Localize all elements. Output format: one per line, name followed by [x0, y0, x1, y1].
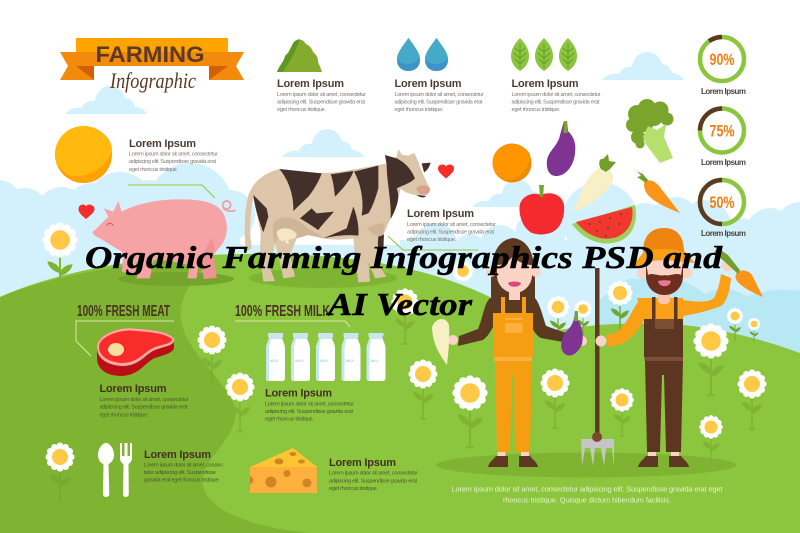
text block: bottom caption: Lorem ipsum dolor sit amet, consectetur adipiscing elit. Suspendisse gravida erat eget — [452, 484, 722, 494]
overlay title: AI Vector — [326, 286, 473, 322]
text block: cow: Lorem ipsum dolor sit amet, consectetur — [407, 222, 496, 228]
text block: leaves: Lorem ipsum dolor sit amet, consectetur — [512, 92, 601, 98]
ring chart 50%: Lorem Ipsum — [701, 229, 746, 238]
icon: hill — [277, 39, 322, 72]
cloud top left — [65, 86, 147, 114]
icon: water drops — [397, 38, 448, 71]
field daisies — [391, 260, 767, 464]
ring chart 90% — [691, 28, 753, 96]
text block: sun: eget rhoncus tristique. — [129, 167, 178, 173]
panel: fresh meat heading — [76, 303, 174, 356]
panel: fresh milk heading: 100% FRESH MILK — [235, 303, 330, 320]
ring chart 50%: 50% — [710, 193, 734, 212]
deeper sky behind man — [600, 276, 800, 360]
text block: water: Lorem Ipsum — [394, 78, 462, 90]
banner title: FARMING — [96, 42, 204, 67]
icon: broccoli — [626, 99, 674, 163]
icon: carrot — [637, 171, 680, 213]
panel: fresh milk heading — [235, 303, 350, 327]
cow and shadow — [245, 149, 431, 288]
text block: sun — [129, 138, 218, 173]
icon: milk bottles: MILK — [370, 359, 380, 363]
ground shadow under people — [436, 452, 736, 478]
icon: leaves — [511, 38, 577, 71]
text block: hill: adipiscing elit. Suspendisse gravida erat — [277, 100, 365, 106]
text block: cheese: eget rhoncus tristique. — [329, 486, 378, 492]
text block: milk: Lorem Ipsum — [265, 388, 332, 400]
text block: cheese — [329, 457, 418, 492]
ring chart 50% — [700, 180, 746, 238]
icon: milk bottles: MILK — [295, 359, 304, 363]
green hills — [0, 254, 800, 533]
ring chart 75%: 75% — [710, 122, 734, 140]
woman farmer — [448, 238, 587, 467]
text block: cow: Lorem Ipsum — [407, 208, 474, 220]
icon: cheese — [250, 448, 317, 493]
icon: apple — [519, 185, 564, 234]
ring chart 75% — [700, 108, 746, 167]
panel: fresh meat heading: 100% FRESH MEAT — [77, 303, 170, 320]
pointer line: cow — [388, 236, 478, 250]
text block: hill: eget rhoncus tristique. — [277, 107, 326, 113]
icon: steak — [97, 328, 174, 376]
icon: orange — [492, 144, 532, 182]
icon: heart right — [438, 164, 454, 178]
text block: cheese: Lorem Ipsum — [329, 457, 396, 469]
icon: milk bottles: MILK — [346, 359, 355, 363]
text block: cutlery: tetur adipiscing elit. Suspendisse — [144, 470, 216, 476]
pitchfork — [581, 268, 614, 466]
eggplant in woman's hand — [561, 311, 583, 356]
text block: meat: adipiscing elit. Suspendisse gravida erat — [100, 405, 188, 411]
text block: sun: Lorem ipsum dolor sit amet, consectetur — [129, 152, 218, 158]
text block: leaves — [512, 78, 601, 113]
text block: cheese: adipiscing elit. Suspendisse gravida erat — [329, 478, 417, 484]
text block: meat: Lorem ipsum dolor sit amet, consectetur — [100, 397, 189, 403]
text block: cheese: Lorem ipsum dolor sit amet, consectetur — [329, 471, 418, 477]
text block: milk: adipiscing elit. Suspendisse gravida erat — [265, 409, 353, 415]
icon: eggplant — [547, 121, 575, 176]
text block: bottom caption — [452, 484, 722, 504]
overlay title — [85, 239, 723, 322]
carrot in man's hand — [714, 248, 763, 297]
text block: hill — [277, 78, 366, 113]
text block: milk: Lorem ipsum dolor sit amet, consectetur — [265, 401, 354, 407]
cloud top right — [602, 52, 684, 80]
text block: leaves: eget rhoncus tristique. — [512, 107, 561, 113]
ring chart 90%: 90% — [710, 50, 734, 69]
icon: milk bottles: MILK — [270, 359, 279, 363]
parsnip in woman's hand — [432, 319, 449, 365]
text block: hill: Lorem ipsum dolor sit amet, consectetur — [277, 92, 366, 98]
overlay title: Organic Farming Infographics PSD and — [85, 239, 723, 275]
banner title: Infographic — [109, 68, 196, 93]
banner title — [60, 38, 244, 93]
ring chart 90%: Lorem Ipsum — [701, 87, 746, 96]
icon: watermelon — [572, 205, 636, 244]
text block: water — [394, 78, 484, 113]
text block: milk — [265, 388, 354, 423]
text block: meat — [100, 383, 189, 418]
pointer line: pig — [128, 185, 215, 198]
cloud behind fruit — [472, 179, 554, 207]
text block: cow — [407, 208, 496, 243]
text block: cow: adipiscing elit. Suspendisse gravida erat — [407, 230, 494, 236]
text block: sun: Lorem Ipsum — [129, 138, 196, 150]
text block: cutlery: Lorem Ipsum — [144, 449, 211, 461]
ring chart 75%: Lorem Ipsum — [701, 158, 746, 167]
text block: cow: eget rhoncus tristique. — [407, 237, 456, 243]
text block: milk: eget rhoncus tristique. — [265, 417, 314, 423]
text block: water: eget rhoncus tristique. — [394, 107, 444, 113]
text block: water: Lorem ipsum dolor sit amet, consectetur — [394, 92, 484, 98]
pig and shadow — [93, 199, 236, 286]
icon: heart left — [78, 204, 94, 219]
text block: meat: Lorem Ipsum — [100, 383, 167, 395]
sky cloud band — [0, 163, 800, 360]
cloud middle — [282, 129, 364, 157]
icon: spoon and fork — [98, 443, 132, 497]
icon: sun — [55, 126, 112, 183]
man farmer — [596, 228, 734, 467]
text block: leaves: Lorem Ipsum — [512, 78, 579, 90]
daisy left with stem — [42, 222, 78, 295]
icon: milk bottles — [266, 333, 386, 381]
daisies on left field — [45, 325, 255, 501]
text block: water: adipiscing elit. Suspendisse gravida erat — [394, 100, 483, 106]
text block: cutlery: Lorem ipsum dolor sit amet, consec- — [144, 463, 224, 469]
text block: cutlery — [144, 449, 224, 484]
text block: leaves: adipiscing elit. Suspendisse gravida erat — [512, 100, 600, 106]
text block: meat: eget rhoncus tristique. — [100, 412, 149, 418]
icon: milk bottles: MILK — [320, 359, 329, 363]
icon: parsnip — [574, 154, 616, 212]
text block: bottom caption: rhoncus tristique. Quisque dictum bibendum facilisis. — [503, 495, 671, 504]
text block: sun: adipiscing elit. Suspendisse gravida erat — [129, 159, 216, 165]
text block: hill: Lorem Ipsum — [277, 78, 344, 90]
text block: cutlery: gravida erat eget rhoncus tristique. — [144, 478, 220, 484]
